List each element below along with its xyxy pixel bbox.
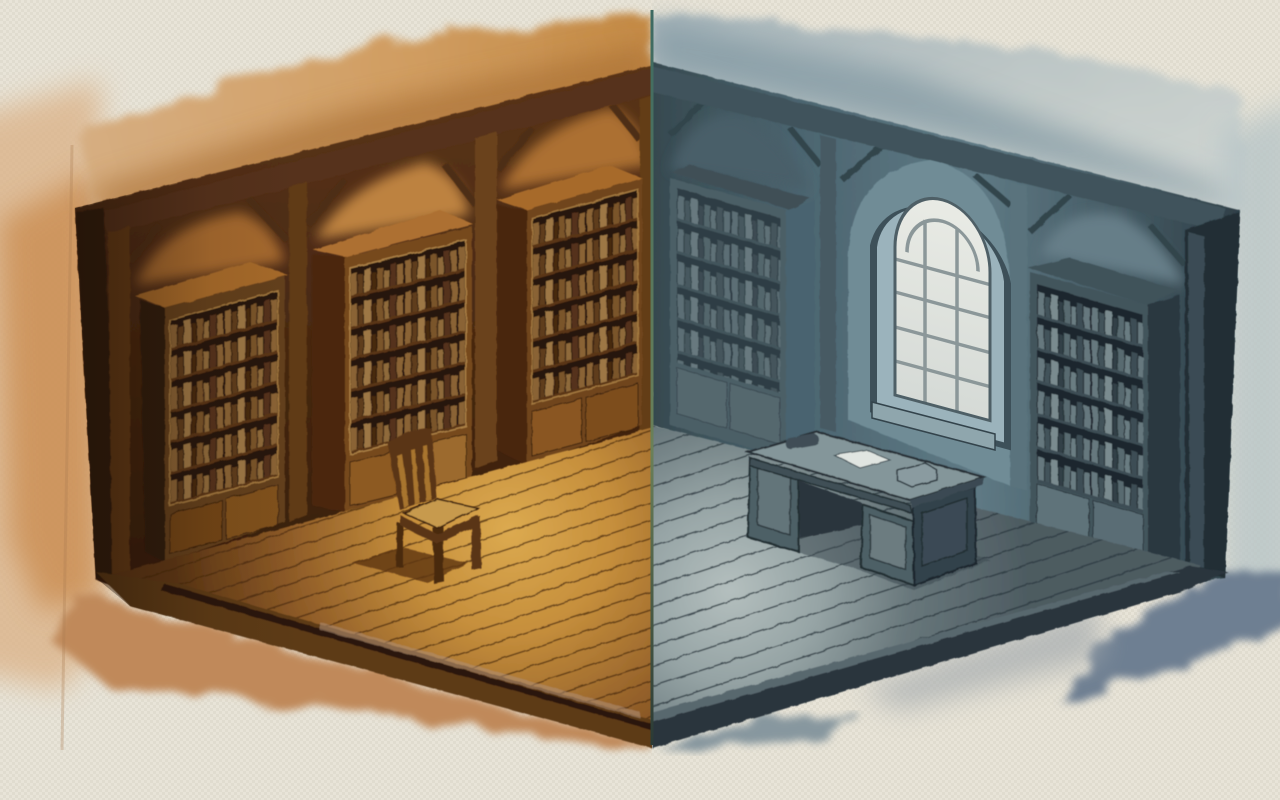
panel: warm room [75,65,652,748]
bookcase one [135,262,288,562]
washes: warm orange brushwork [0,15,652,755]
bookcase left [670,165,815,458]
washes: cool blue brushwork [652,12,1280,752]
left side shading [75,176,234,626]
ceiling beam [652,66,1225,232]
wooden floor [96,428,652,748]
bookcase two [312,210,473,512]
window sill [872,402,995,450]
panel: cool room [652,62,1240,748]
desk [745,432,990,590]
back wall [652,62,1240,590]
pillars [820,135,1240,578]
centre seam [650,10,654,745]
wooden ceiling beam [211,102,616,208]
bookcase three [497,165,642,465]
desk items: scroll, paper, book [784,433,937,487]
alcove arches [670,115,1185,285]
arched window [848,160,1011,486]
roof braces [670,100,1185,265]
roof braces [250,105,640,242]
pillars [76,96,652,578]
back wall [75,65,652,600]
chair [353,428,481,584]
alcove arches [135,108,650,285]
bookcase right [1028,258,1180,565]
wooden floor [652,425,1228,748]
